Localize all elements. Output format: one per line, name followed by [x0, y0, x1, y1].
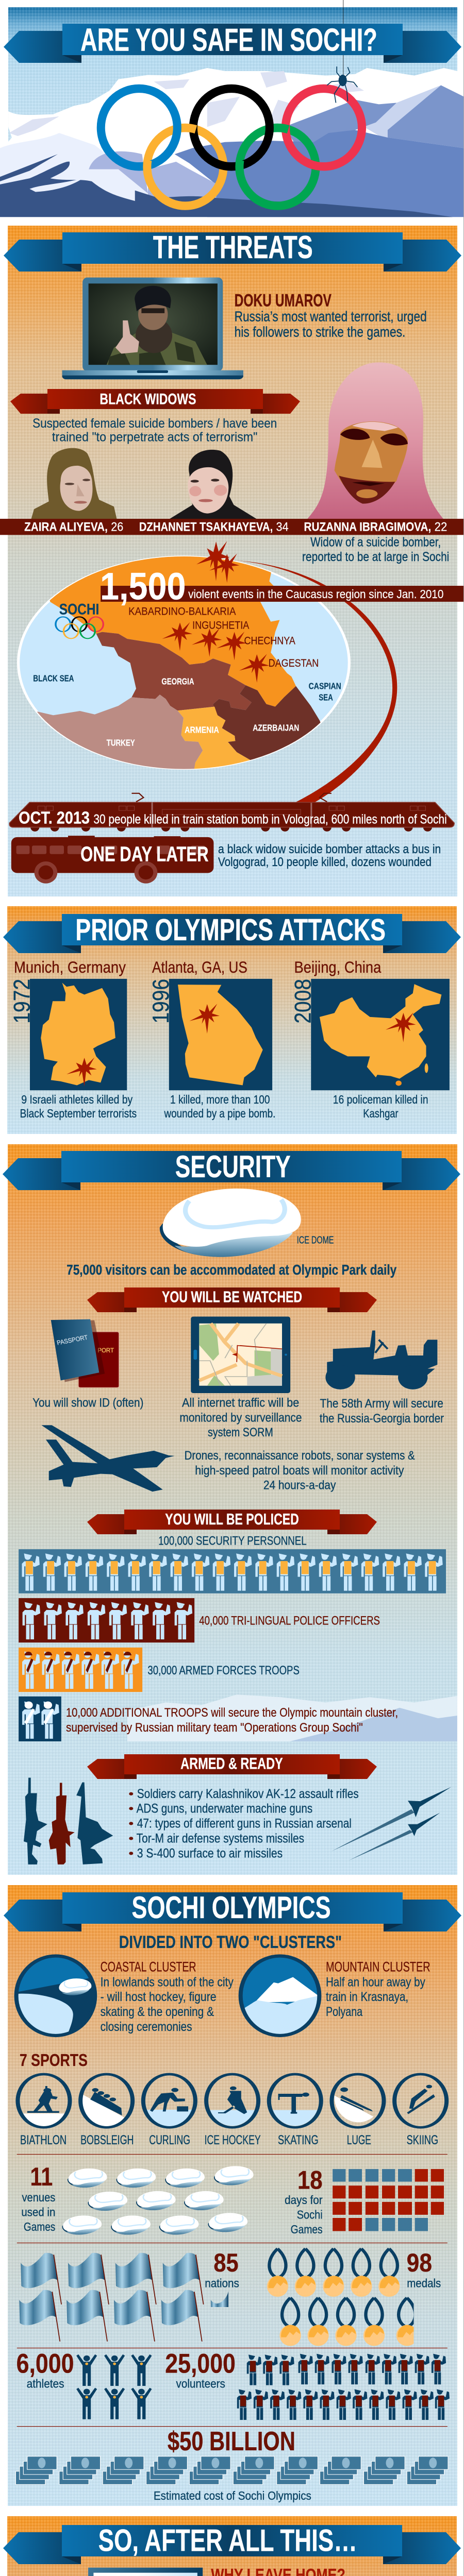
- card: Atlanta 1996: 1 killed, more than 100: [170, 1094, 270, 1107]
- stat: 25,000 volunteers: volunteers: [176, 2378, 225, 2391]
- stat: 6,000 athletes: athletes: [27, 2378, 64, 2391]
- stat: 98 medals: 98: [407, 2248, 432, 2277]
- stat: 85 nations: 85: [213, 2248, 239, 2277]
- pictogram bar: security personnel: [19, 1549, 446, 1594]
- pictogram bar: police officers: 40,000 TRI-LINGUAL POLICE OFFICERS: [199, 1614, 380, 1628]
- icon: small olympic rings: [56, 617, 103, 638]
- card: Munich 1972: [9, 959, 137, 1120]
- icon: passports: PORT: [97, 1347, 114, 1354]
- text: additional troops: supervised by Russian military team "Operations Group Sochi": [66, 1721, 363, 1735]
- panel: prior olympics attacks: [3, 906, 461, 1134]
- pictogram bar: additional troops: [19, 1697, 61, 1741]
- name bar: 26: [111, 520, 123, 534]
- banner: you will be watched: YOU WILL BE WATCHED: [162, 1288, 302, 1306]
- map labels: DAGESTAN: [269, 657, 319, 669]
- map labels: KABARDINO-BALKARIA: [128, 605, 236, 617]
- banner: black widows: [10, 389, 300, 414]
- banner: you will be policed: YOU WILL BE POLICED: [165, 1511, 299, 1528]
- portrait: Dzhannet Tsakhayeva: [169, 450, 257, 519]
- icon: missiles: [332, 1787, 451, 1860]
- labels: sports: CURLING: [149, 2133, 190, 2147]
- stat: 6,000 athletes: [16, 2348, 74, 2391]
- name bar: ZAIRA ALIYEVA,: [24, 520, 108, 534]
- text: weapons list: 47: types of different guns in Russian arsenal: [137, 1817, 352, 1831]
- text: mountain cluster: train in Krasnaya,: [326, 1990, 408, 2004]
- illustration: snowy mountains: [0, 68, 464, 217]
- stat: 50 billion: $50 BILLION: [168, 2426, 295, 2456]
- stat: 18 days: Sochi: [297, 2209, 323, 2222]
- text: weapons list: ADS guns, underwater machine guns: [137, 1802, 312, 1816]
- text: weapons list: Tor-M air defense systems missiles: [137, 1832, 304, 1845]
- panel: sochi olympics: [4, 1885, 461, 2506]
- banner: so after all this: [3, 2523, 461, 2564]
- text: coastal cluster: [101, 1959, 234, 2034]
- map labels: BLACK SEA: [33, 674, 74, 684]
- panel: so after all this: [0, 2516, 464, 2576]
- labels: sports: [20, 2133, 438, 2147]
- card: Munich 1972: Munich, Germany: [14, 959, 126, 977]
- card: Munich 1972: Black September terrorists: [20, 1107, 137, 1120]
- text: security personnel: 100,000 SECURITY PERSONNEL: [158, 1534, 307, 1548]
- icon: rifles: [24, 1778, 113, 1865]
- labels: sports: ICE HOCKEY: [205, 2133, 261, 2147]
- portrait: Ruzanna Ibragimova: [307, 362, 444, 519]
- text: suspected bombers: trained "to perpetrate acts of terrorism": [52, 430, 257, 444]
- banner: sochi olympics: SOCHI OLYMPICS: [131, 1890, 331, 1925]
- stat: 11 venues: Games: [24, 2221, 55, 2234]
- icon: mountain cluster: [238, 1956, 320, 2038]
- icon: military jeep: [325, 1331, 437, 1389]
- text: coastal cluster: - will host hockey, figure: [101, 1990, 217, 2004]
- labels: sports: SKIING: [407, 2133, 438, 2147]
- portrait: Zaira Aliyeva: [31, 448, 117, 519]
- map: Caucasus region: CASPIAN: [309, 682, 341, 691]
- icon: train with October 2013 text: OCT. 2013: [19, 808, 90, 827]
- pictogram: money stacks: [15, 2456, 448, 2484]
- label: ice dome: ICE DOME: [297, 1234, 334, 1246]
- text: coastal cluster: In lowlands south of the city: [101, 1975, 234, 1989]
- icon: passports: PASSPORT: [56, 1333, 89, 1346]
- icon: black widow spider: [327, 0, 357, 103]
- banner: armed and ready: ARMED & READY: [180, 1754, 283, 1773]
- map labels: CHECHNYA: [244, 634, 295, 647]
- map labels: ARMENIA: [185, 725, 219, 735]
- pictogram bar: armed forces: [19, 1648, 300, 1692]
- text: internet monitoring: All internet traffic will be: [182, 1396, 299, 1410]
- panel: security: [3, 1144, 460, 1875]
- name bar: DZHANNET TSAKHAYEVA,: [139, 520, 273, 534]
- map labels: AZERBAIJAN: [253, 723, 299, 733]
- icon: skating: [269, 2074, 321, 2127]
- text: weapons list: 3 S-400 surface to air missiles: [137, 1846, 283, 1861]
- icon: train with October 2013 text: [9, 793, 454, 832]
- labels: sports: LUGE: [347, 2133, 371, 2147]
- stat: 18 days: Games: [291, 2223, 323, 2236]
- stat: 98 medals: [407, 2248, 441, 2290]
- stat: 18 days: days for: [285, 2194, 323, 2207]
- icon: ice dome: [160, 1189, 301, 1257]
- pictogram bar: police officers: [19, 1598, 380, 1642]
- icon: curling: [143, 2074, 195, 2127]
- stat: 18 days: 18: [297, 2165, 323, 2195]
- card: Atlanta 1996: Atlanta, GA, US: [152, 959, 247, 977]
- map labels: [33, 601, 341, 748]
- text: coastal cluster: COASTAL CLUSTER: [101, 1959, 196, 1974]
- card: Beijing 2008: 2008: [290, 979, 316, 1024]
- stat: 6,000 athletes: 6,000: [16, 2348, 74, 2379]
- name bar: 34: [276, 520, 289, 534]
- card: Munich 1972: 1972: [9, 979, 35, 1024]
- icon: skiing: [394, 2074, 446, 2127]
- map labels: TURKEY: [107, 738, 135, 748]
- text: widow caption: [302, 535, 449, 564]
- stat: 11 venues: used in: [21, 2206, 55, 2219]
- text: Doku Umarov: his followers to strike the games.: [235, 324, 405, 340]
- callout: 1,500 violent events: [100, 565, 464, 608]
- map: Caucasus region: [19, 546, 349, 771]
- text: mountain cluster: Polyana: [326, 2005, 362, 2019]
- text: internet monitoring: monitored by surveillance: [179, 1411, 302, 1425]
- text: weapons list: [129, 1787, 359, 1861]
- stat: 98 medals: medals: [407, 2277, 441, 2290]
- card: Atlanta 1996: wounded by a pipe bomb.: [164, 1107, 275, 1120]
- text: 58th army: [320, 1397, 444, 1426]
- pictogram: venue domes: [62, 2166, 254, 2234]
- sky background: [8, 7, 457, 151]
- stat: 25,000 volunteers: [165, 2348, 236, 2391]
- illustration: faint mountains: [127, 1694, 457, 1741]
- text: Doku Umarov: [235, 291, 427, 340]
- banner: sochi olympics: [4, 1890, 461, 1931]
- text: show id: You will show ID (often): [32, 1396, 143, 1410]
- card: Beijing 2008: Kashgar: [363, 1107, 399, 1120]
- icon: tablet with map: [191, 1317, 290, 1393]
- callout: 1,500 violent events: 1,500: [100, 565, 186, 608]
- name bar: 22: [435, 520, 447, 534]
- text: mountain cluster: [326, 1959, 430, 2019]
- text: coastal cluster: closing ceremonies: [101, 2020, 192, 2034]
- icon: luge: [332, 2074, 384, 2127]
- panel: hero header: [0, 0, 464, 217]
- pictogram: flags: [19, 2253, 228, 2342]
- labels: sports: BIATHLON: [20, 2133, 67, 2147]
- stat: 85 nations: [205, 2248, 239, 2290]
- pictogram: volunteers: [237, 2354, 450, 2420]
- panel: the threats: [0, 226, 464, 896]
- stat: 11 venues: 11: [30, 2162, 53, 2192]
- icon: bobsleigh: [80, 2074, 132, 2127]
- card: Beijing 2008: [290, 959, 450, 1120]
- map labels: GEORGIA: [161, 677, 194, 687]
- icon: bus with one day later text: ONE DAY LATER: [80, 842, 209, 866]
- map labels: SEA: [319, 692, 333, 703]
- map markers: attack bursts: [162, 622, 269, 683]
- banner: you will be policed: [87, 1510, 377, 1534]
- panel: sochi olympics: 7 SPORTS: [20, 2050, 88, 2070]
- icon: laptop with video still of Doku Umarov: [62, 278, 243, 379]
- banner: armed and ready: [87, 1754, 377, 1779]
- text: Doku Umarov: DOKU UMAROV: [235, 291, 332, 310]
- name bar: [0, 519, 464, 535]
- labels: sports: BOBSLEIGH: [80, 2133, 134, 2147]
- banner: black widows: BLACK WIDOWS: [100, 391, 196, 408]
- map labels: SOCHI: [59, 601, 99, 618]
- icon: bus with one day later text: [11, 836, 213, 884]
- icon: ice hockey: [206, 2074, 258, 2127]
- stat: 18 days: [285, 2165, 323, 2236]
- icon: passports: [51, 1319, 119, 1387]
- card: Beijing 2008: Beijing, China: [294, 959, 382, 977]
- icon: coastal cluster: [12, 1956, 101, 2038]
- banner: you will be watched: [87, 1287, 377, 1312]
- text: internet monitoring: [179, 1396, 302, 1439]
- pictogram: calendar squares: [333, 2169, 444, 2231]
- text: internet monitoring: system SORM: [208, 1426, 273, 1439]
- text: additional troops: [66, 1706, 398, 1735]
- olympic rings: [101, 89, 362, 206]
- text: drones: [185, 1449, 415, 1492]
- text: drones: high-speed patrol boats will monitor activity: [195, 1464, 404, 1478]
- pictogram: athletes: [76, 2354, 152, 2419]
- banner: the threats: [4, 229, 461, 272]
- card: Atlanta 1996: 1996: [148, 979, 174, 1024]
- icon: biathlon: [18, 2074, 70, 2127]
- icon: television with 1,539: [88, 2568, 203, 2576]
- banner: the threats: THE THREATS: [153, 229, 313, 265]
- burst icons at top of map: [196, 541, 239, 583]
- stat: 25,000 volunteers: 25,000: [165, 2348, 236, 2379]
- stat: 11 venues: venues: [22, 2191, 55, 2204]
- card: Munich 1972: 9 Israeli athletes killed by: [21, 1094, 133, 1107]
- text: bus attack: [218, 843, 441, 869]
- caption: estimated cost: Estimated cost of Sochi Olympics: [154, 2489, 311, 2503]
- arrow: curved trajectory to Volgograd: [234, 560, 397, 803]
- card: Atlanta 1996: [148, 959, 275, 1120]
- map labels: INGUSHETIA: [192, 619, 250, 632]
- text: drones: 24 hours-a-day: [263, 1479, 336, 1492]
- pictogram bar: armed forces: 30,000 ARMED FORCES TROOPS: [147, 1664, 300, 1677]
- banner: security: SECURITY: [175, 1149, 291, 1184]
- text: Doku Umarov: Russia’s most wanted terrorist, urged: [235, 308, 427, 325]
- card: Beijing 2008: 16 policeman killed in: [333, 1094, 428, 1107]
- pictogram: medals: [267, 2249, 418, 2346]
- text: coastal cluster: skating & the opening &: [101, 2005, 214, 2019]
- stat: 85 nations: nations: [205, 2277, 239, 2290]
- text: suspected bombers: [32, 416, 277, 444]
- icon: drone: [41, 1425, 175, 1492]
- labels: sports: SKATING: [278, 2133, 319, 2147]
- stat: 11 venues: [21, 2162, 55, 2234]
- banner: security: [3, 1149, 460, 1190]
